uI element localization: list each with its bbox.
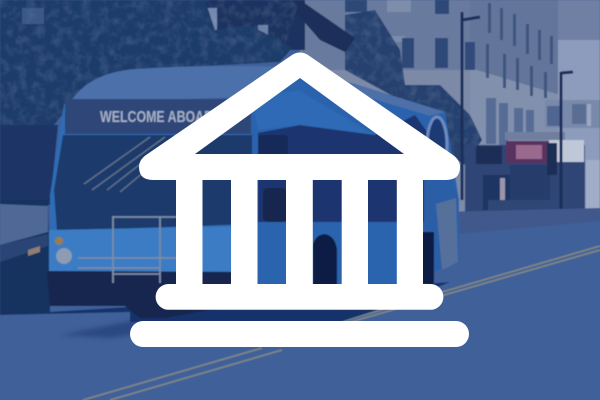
bus: front body — [50, 98, 250, 270]
upper building with awnings — [205, 0, 355, 52]
bus: rear wheel — [422, 232, 434, 284]
foliage: sidewalk tree — [344, 10, 482, 166]
bus: rear corner panel — [436, 198, 458, 270]
icon: upper base bar — [156, 284, 443, 310]
bus: upper side panel — [252, 90, 375, 135]
bus: roof upper side — [285, 68, 445, 116]
dark area behind car — [0, 125, 58, 205]
road markings: double yellow line — [83, 246, 600, 400]
bus: bike rack — [78, 216, 176, 283]
car at left — [0, 200, 50, 315]
bus: door window — [258, 135, 288, 155]
icon: pediment roof — [139, 52, 460, 180]
icon: column 1 — [176, 178, 202, 286]
icon: column 2 — [231, 178, 258, 286]
bus: destination sign — [65, 99, 251, 134]
building: pale tower at right — [545, 0, 600, 220]
icon: lower base bar — [130, 321, 469, 347]
bus: side lower panel — [252, 222, 424, 284]
street lamp posts — [462, 12, 573, 210]
storefront row — [465, 132, 585, 213]
icon: column 4 — [342, 178, 368, 286]
bus: side windows — [258, 115, 450, 222]
bus: mid wheel — [313, 234, 337, 285]
bus: windshield — [54, 135, 252, 231]
bus: headlight — [56, 248, 72, 264]
bus: roof cap — [62, 66, 285, 118]
bus: front bumper — [47, 271, 252, 318]
bus: lower front panel — [49, 226, 252, 272]
icon: government building — [130, 52, 469, 347]
bus: windshield reflection — [84, 137, 180, 192]
bus — [47, 66, 459, 318]
foliage: large tree at top left — [0, 0, 300, 135]
icon: column 3 — [286, 178, 313, 286]
bus: rear side — [424, 150, 458, 272]
bus: rear side body — [140, 66, 459, 315]
icon: column 5 — [397, 178, 423, 286]
building: tan office block — [300, 0, 560, 220]
bus: marker badge — [55, 237, 63, 245]
dark strip beneath bus — [0, 282, 450, 322]
bus: mirror — [263, 188, 287, 222]
sidewalk — [440, 208, 600, 234]
soft bus shadow on road — [60, 320, 200, 338]
bus: destination text: WELCOME ABOARD — [100, 109, 222, 126]
traffic light — [547, 143, 557, 175]
bus: rear target logo — [427, 117, 447, 173]
